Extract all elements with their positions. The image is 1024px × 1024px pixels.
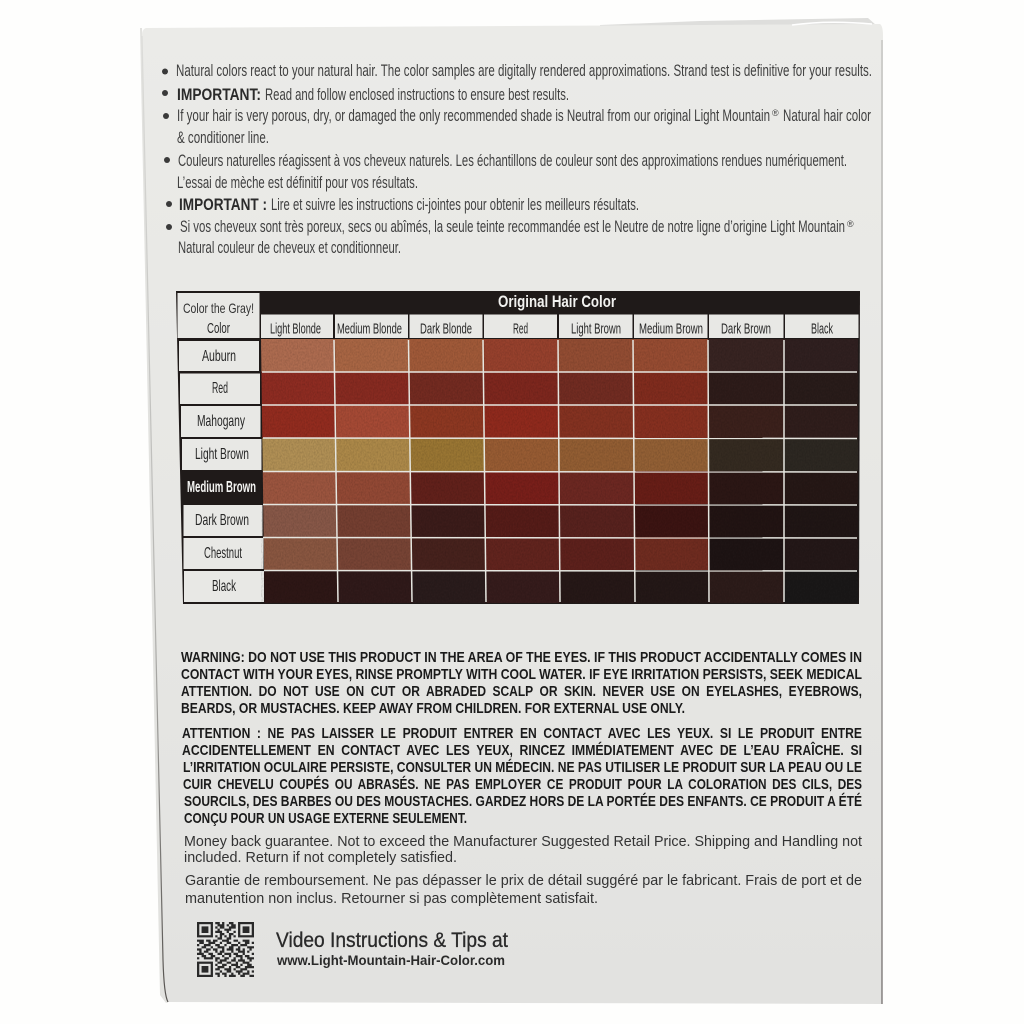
French guarantee: manutention non inclus. Retourner si pas complètement satisfait. — [185, 890, 598, 907]
chart heading: Original Hair Color — [498, 292, 616, 311]
English usage notes: IMPORTANT: — [177, 86, 261, 104]
French warning: CUIR CHEVELU COUPÉS OU ABRASÉS. NE PAS EMPLOYER CE PRODUIT POUR LA COLORATION DES CILS, DES — [183, 776, 862, 793]
swatch column: Dark Brown — [708, 339, 786, 603]
original hair color header row: Light Brown — [571, 320, 621, 338]
bullet list markers: English — [162, 68, 169, 119]
French warning: ATTENTION : NE PAS LAISSER LE PRODUIT ENTRER EN CONTACT AVEC LES YEUX. SI LE PRODUIT ENTRE — [182, 725, 862, 742]
gray color row labels: Light Brown — [195, 446, 249, 463]
swatch column: Black — [784, 339, 858, 603]
English usage notes: ® — [772, 108, 779, 118]
gray color row labels: Dark Brown — [195, 512, 249, 529]
gray color row labels — [179, 341, 264, 602]
swatch column: Medium Blonde — [335, 339, 413, 603]
English warning: WARNING: DO NOT USE THIS PRODUCT IN THE AREA OF THE EYES. IF THIS PRODUCT ACCIDENTALLY COMES IN — [181, 649, 862, 666]
French usage notes: Lire et suivre les instructions ci-jointes pour obtenir les meilleurs résultats. — [271, 195, 639, 214]
English warning: CONTACT WITH YOUR EYES, RINSE PROMPTLY WITH COOL WATER. IF EYE IRRITATION PERSISTS, SEEK MEDICAL — [181, 666, 862, 683]
French warning: ACCIDENTELLEMENT EN CONTACT AVEC LES YEUX, RINCEZ IMMÉDIATEMENT AVEC DE L’EAU FRAÎCHE. SI — [182, 741, 862, 759]
French guarantee — [185, 872, 862, 907]
color the gray column header — [178, 293, 260, 338]
French warning: CONÇU POUR UN USAGE EXTERNE SEULEMENT. — [184, 810, 467, 827]
gray color row labels: Black — [212, 578, 237, 595]
English guarantee: included. Return if not completely satisfied. — [184, 849, 457, 866]
swatch column: Light Brown — [558, 339, 636, 603]
color the gray column header: Color — [207, 320, 230, 337]
original hair color header row: Light Blonde — [270, 320, 321, 338]
gray color row labels: Medium Brown — [187, 479, 256, 496]
hair color results chart — [176, 291, 860, 604]
original hair color header row: Medium Blonde — [337, 320, 402, 338]
original hair color header row: Black — [811, 320, 833, 338]
French usage notes — [164, 151, 854, 257]
French warning: SOURCILS, DES BARBES OU DES MOUSTACHES. GARDEZ HORS DE LA PORTÉE DES ENFANTS. CE PRODUIT A ÉTÉ — [184, 793, 862, 810]
English warning — [181, 649, 862, 717]
English usage notes: Read and follow enclosed instructions to ensure best results. — [265, 85, 569, 104]
French usage notes: L’essai de mèche est définitif pour vos résultats. — [177, 173, 418, 192]
French warning — [182, 725, 862, 827]
English usage notes: If your hair is very porous, dry, or damaged the only recommended shade is Neutral from our original Light Mountain — [177, 106, 770, 125]
original hair color header row: Dark Blonde — [420, 320, 472, 338]
swatch column: Red — [484, 339, 561, 603]
icon: QR code — [197, 923, 254, 976]
French warning: L’IRRITATION OCULAIRE PERSISTE, CONSULTER UN MÉDECIN. NE PAS UTILISER LE PRODUIT SUR LA PEAU OU LE — [183, 759, 862, 776]
English warning: ATTENTION. DO NOT USE ON CUT OR ABRADED SCALP OR SKIN. NEVER USE ON EYELASHES, EYEBROWS, — [181, 683, 862, 700]
color the gray column header: Color the Gray! — [183, 300, 254, 316]
English usage notes: & conditioner line. — [177, 128, 269, 147]
English warning: BEARDS, OR MUSTACHES. KEEP AWAY FROM CHILDREN. FOR EXTERNAL USE ONLY. — [181, 700, 685, 717]
original hair color header row: Dark Brown — [721, 320, 771, 338]
gray color row labels: Red — [212, 380, 228, 397]
video instructions text: Video Instructions & Tips at — [276, 929, 508, 952]
gray color row labels: Chestnut — [204, 545, 242, 562]
bullet list markers: French — [164, 157, 172, 230]
chart frame — [176, 291, 860, 604]
French guarantee: Garantie de remboursement. Ne pas dépasser le prix de détail suggéré par le fabricant. Frais de port et de — [185, 872, 862, 889]
swatch grid — [261, 339, 858, 603]
English usage notes — [162, 61, 872, 147]
gray color row labels: Auburn — [202, 348, 236, 365]
English usage notes: Natural hair color — [783, 106, 871, 125]
French usage notes: ® — [847, 219, 854, 229]
swatch column: Medium Brown — [633, 339, 711, 603]
product box — [140, 18, 883, 1004]
English guarantee — [184, 833, 863, 866]
video instructions text — [276, 929, 508, 968]
original hair color header row — [261, 314, 858, 338]
gray color row labels: Mahogany — [197, 413, 245, 430]
French usage notes: Natural couleur de cheveux et conditionneur. — [178, 238, 401, 257]
video instructions text: www.Light-Mountain-Hair-Color.com — [276, 953, 505, 968]
English guarantee: Money back guarantee. Not to exceed the Manufacturer Suggested Retail Price. Shipping and Handling not — [184, 833, 863, 850]
swatch column: Light Blonde — [261, 339, 339, 603]
French usage notes: IMPORTANT : — [179, 196, 267, 214]
swatch column: Dark Blonde — [409, 339, 487, 603]
original hair color header row: Red — [513, 320, 528, 338]
original hair color header row: Medium Brown — [639, 320, 703, 338]
